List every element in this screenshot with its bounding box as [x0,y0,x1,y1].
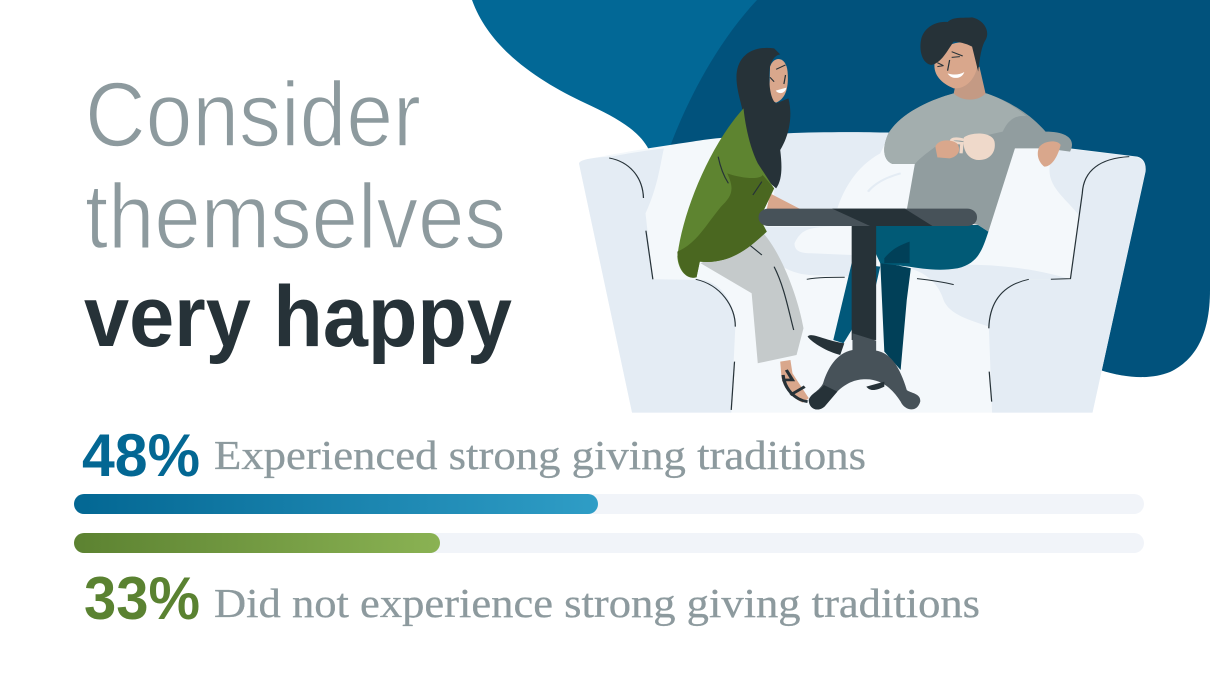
background blob: light blue [472,0,760,152]
progress bar: 48% [74,494,1144,514]
label: Experienced strong giving traditions [214,432,866,478]
table: base [809,333,920,410]
woman: arm [766,193,801,213]
man: neck [954,67,986,100]
background blob: dark blue [668,0,1210,377]
progress bar: 33% [74,533,1144,553]
title line: Consider: Consider [85,64,421,166]
table: pedestal [852,225,876,340]
woman: trousers [701,232,803,363]
label: Did not experience strong giving traditions [214,580,980,626]
title [84,64,512,365]
illustration: couple on sofa [579,17,1146,413]
man: far shoe [808,335,844,355]
man [808,17,1072,370]
man: far leg [833,263,880,343]
man: face [934,42,977,88]
title line: very happy: very happy [84,269,512,365]
value 33%: 33% [84,565,200,632]
table [759,209,977,410]
woman [677,48,809,403]
man: right hand [1038,141,1061,167]
title line: themselves: themselves [85,166,506,268]
man: thigh [874,225,988,270]
table: top [759,209,977,226]
man: left hand [935,140,959,158]
stat: 48% row [82,422,866,489]
man: near leg [880,262,911,370]
man: hair [920,17,987,72]
man: cup [964,133,995,160]
woman: green shawl [677,108,774,278]
woman: foot and sandal [780,360,809,403]
woman: hair [736,48,790,188]
sofa [579,132,1146,413]
stat: 33% row [84,565,980,632]
value 48%: 48% [82,422,200,489]
woman: face [769,59,788,103]
man: sweater [884,93,1072,232]
